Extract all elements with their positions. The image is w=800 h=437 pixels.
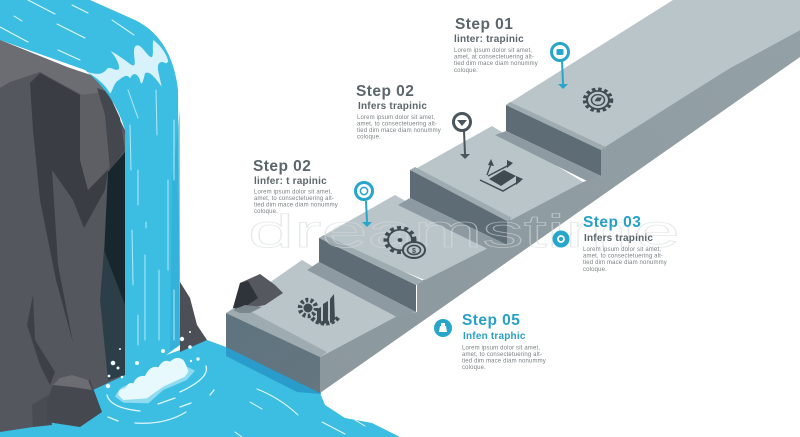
- text block: step 02 lower: tied dim mace diam nonummy: [254, 202, 338, 208]
- text block: step 03: coloque.: [583, 267, 607, 273]
- text block: step 02 lower: Step 02: [253, 158, 311, 175]
- icon: gear on step 1: [585, 89, 611, 111]
- cliff rock: [0, 40, 125, 432]
- text block: step 03: Lorem ipsum dolor sit amet,: [583, 247, 661, 253]
- icon: growth arrows on step 2: [480, 159, 523, 191]
- waterfall: [0, 0, 180, 385]
- text block: step 05: Step 05: [462, 312, 520, 329]
- text block: step 02 upper: Lorem ipsum dolor sit amet,: [357, 115, 435, 121]
- badge: step 03: [552, 230, 570, 248]
- text block: step 05: Lorem ipsum dolor sit amet,: [462, 346, 540, 352]
- text block: step 02 upper: tied dim mace diam nonummy: [357, 128, 441, 134]
- text block: step 05: amet, to consectetuering alt-: [462, 352, 542, 358]
- text block: step 02 upper: Step 02: [356, 83, 414, 100]
- pin: step 1: [552, 44, 568, 89]
- badge: step 05: [434, 319, 452, 337]
- text block: step 01: [454, 16, 538, 74]
- text block: step 05: Infen traphic: [463, 331, 526, 342]
- text block: step 03: tied dim mace diam nonummy: [583, 260, 667, 266]
- rock right of waterfall: [180, 282, 207, 352]
- text block: step 02 upper: amet, to consectetuering alt-: [357, 122, 437, 128]
- text block: step 02 lower: [253, 158, 338, 215]
- step 5 front face: [226, 313, 320, 393]
- river pool: [0, 340, 400, 437]
- step 3 top surface: [319, 195, 488, 280]
- boulder at waterfall base: [32, 375, 102, 427]
- text block: step 02 upper: [356, 83, 441, 140]
- foam at waterfall crest: [87, 40, 168, 93]
- text block: step 01: coloque.: [454, 68, 478, 74]
- rock behind bottom step: [233, 274, 283, 313]
- text block: step 02 upper: coloque.: [357, 134, 381, 140]
- step 2 top surface: [410, 126, 583, 220]
- text block: step 01: amet, at consectetuering alt-: [454, 54, 534, 60]
- icon: gear and coin on step 3: $: [412, 248, 416, 255]
- icon: bar chart and gears on step 4: [300, 294, 339, 324]
- text block: step 01: Lorem ipsum dolor sit amet,: [454, 48, 532, 54]
- text block: step 05: coloque.: [462, 365, 486, 371]
- text block: step 03: [583, 214, 667, 273]
- text block: step 02 lower: coloque.: [254, 209, 278, 215]
- step 4 top surface: [226, 260, 397, 357]
- text block: step 05: [462, 312, 546, 371]
- text block: step 02 lower: amet, to consectetuering alt-: [254, 196, 334, 202]
- pin: step 3: [356, 182, 372, 227]
- text block: step 02 lower: Lorem ipsum dolor sit amet,: [254, 190, 332, 196]
- text block: step 03: amet, to consectetuering alt-: [583, 254, 663, 260]
- step 1 top surface: [506, 0, 800, 147]
- text block: step 01: Step 01: [455, 16, 513, 33]
- long right side face: [320, 30, 800, 393]
- staircase: [226, 0, 800, 393]
- splash foam and ripples: [106, 331, 214, 423]
- text block: step 01: tied dim mace diam nonummy: [454, 61, 538, 67]
- text block: step 05: tied dim mace diam nonummy: [462, 358, 546, 364]
- pin: step 2: [454, 114, 470, 159]
- text block: step 02 lower: linfer: t rapinic: [254, 176, 327, 187]
- text block: step 03: Infers trapinic: [584, 233, 653, 244]
- icon: gear and coin on step 3: [386, 228, 425, 258]
- text block: step 03: Step 03: [583, 214, 641, 231]
- text block: step 02 upper: Infers trapinic: [358, 101, 427, 112]
- text block: step 01: linter: trapinic: [454, 34, 524, 45]
- watermark: dreamstime: [248, 205, 680, 257]
